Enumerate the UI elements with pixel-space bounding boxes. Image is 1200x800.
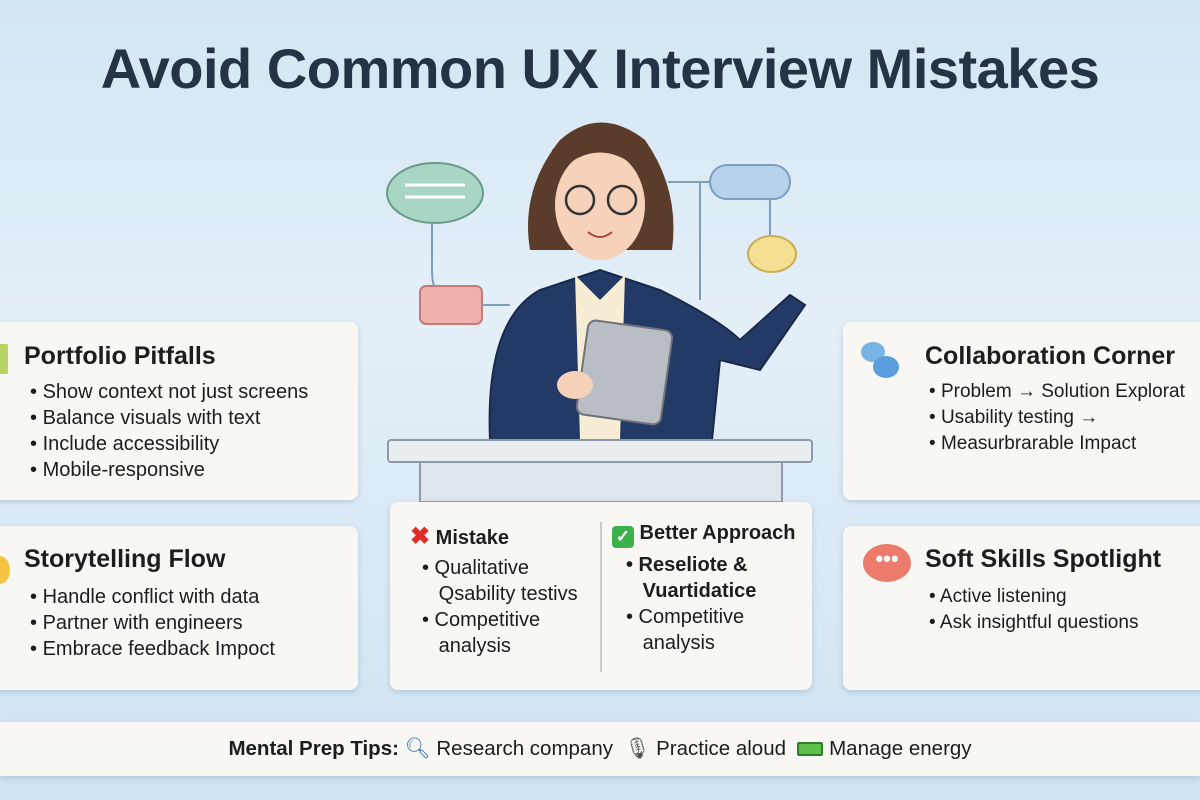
column: mistake: • Qualitative bbox=[422, 557, 529, 579]
icon: emoji bbox=[0, 556, 10, 584]
column: better approach: analysis bbox=[643, 632, 715, 654]
column: mistake: Qsability testivs bbox=[439, 583, 578, 605]
icon: speech bubble bbox=[863, 544, 911, 582]
person bbox=[490, 122, 805, 440]
panel: storytelling flow bbox=[0, 526, 358, 690]
column: better approach: ✓ bbox=[616, 527, 630, 546]
icon: speech bubble: ••• bbox=[875, 546, 899, 571]
panel: soft skills spotlight: Soft Skills Spotlight bbox=[925, 545, 1161, 573]
column: mistake: ✖ Mistake bbox=[410, 523, 509, 550]
illustration: presenter at podium bbox=[386, 122, 813, 502]
column: better approach: Better Approach bbox=[640, 522, 796, 544]
column: better approach: • Competitive bbox=[626, 606, 744, 628]
panel: collaboration corner: Problem → Solution Explorat bbox=[941, 381, 1185, 402]
panel: soft skills spotlight: Ask insightful questions bbox=[940, 612, 1138, 633]
panel: storytelling flow: Partner with engineers bbox=[43, 612, 243, 634]
podium bbox=[388, 440, 812, 502]
column: mistake: • Competitive bbox=[422, 609, 540, 631]
panel: soft skills spotlight bbox=[843, 526, 1200, 690]
panel: collaboration corner: Collaboration Corner bbox=[925, 342, 1175, 370]
panel: portfolio pitfalls bbox=[0, 322, 358, 500]
title: Avoid Common UX Interview Mistakes bbox=[101, 37, 1099, 100]
bottom bar: mental prep tips: Mental Prep Tips: 🔍︎ Research company 🎙︎ Practice aloud Manage energy bbox=[228, 737, 972, 760]
bottom bar: mental prep tips bbox=[0, 722, 1200, 776]
panel: storytelling flow: Embrace feedback Impoct bbox=[43, 638, 275, 660]
panel: storytelling flow: Handle conflict with data bbox=[43, 586, 259, 608]
column: better approach: Vuartidatice bbox=[643, 580, 756, 602]
icon: chat bubbles bbox=[861, 342, 899, 378]
icon: folder bbox=[0, 344, 8, 374]
column: mistake: analysis bbox=[439, 635, 511, 657]
panel: soft skills spotlight: Active listening bbox=[940, 586, 1067, 607]
panel: mistake vs better approach bbox=[390, 502, 812, 690]
panel: portfolio pitfalls: Include accessibility bbox=[43, 433, 219, 455]
panel: collaboration corner: Usability testing → bbox=[941, 407, 1098, 428]
column: better approach bbox=[612, 522, 796, 654]
panel: storytelling flow: Storytelling Flow bbox=[24, 545, 225, 573]
panel: collaboration corner bbox=[843, 322, 1200, 500]
panel: collaboration corner: Measurbrarable Impact bbox=[941, 433, 1136, 454]
icon: diagram bubbles bbox=[387, 163, 796, 324]
panel: portfolio pitfalls: Balance visuals with text bbox=[43, 407, 260, 429]
panel: portfolio pitfalls: Portfolio Pitfalls bbox=[24, 342, 216, 370]
panel: portfolio pitfalls: Mobile-responsive bbox=[43, 459, 205, 481]
column: better approach: • Reseliote & bbox=[626, 554, 747, 576]
panel: portfolio pitfalls: Show context not just screens bbox=[43, 381, 308, 403]
column: mistake bbox=[410, 523, 578, 657]
